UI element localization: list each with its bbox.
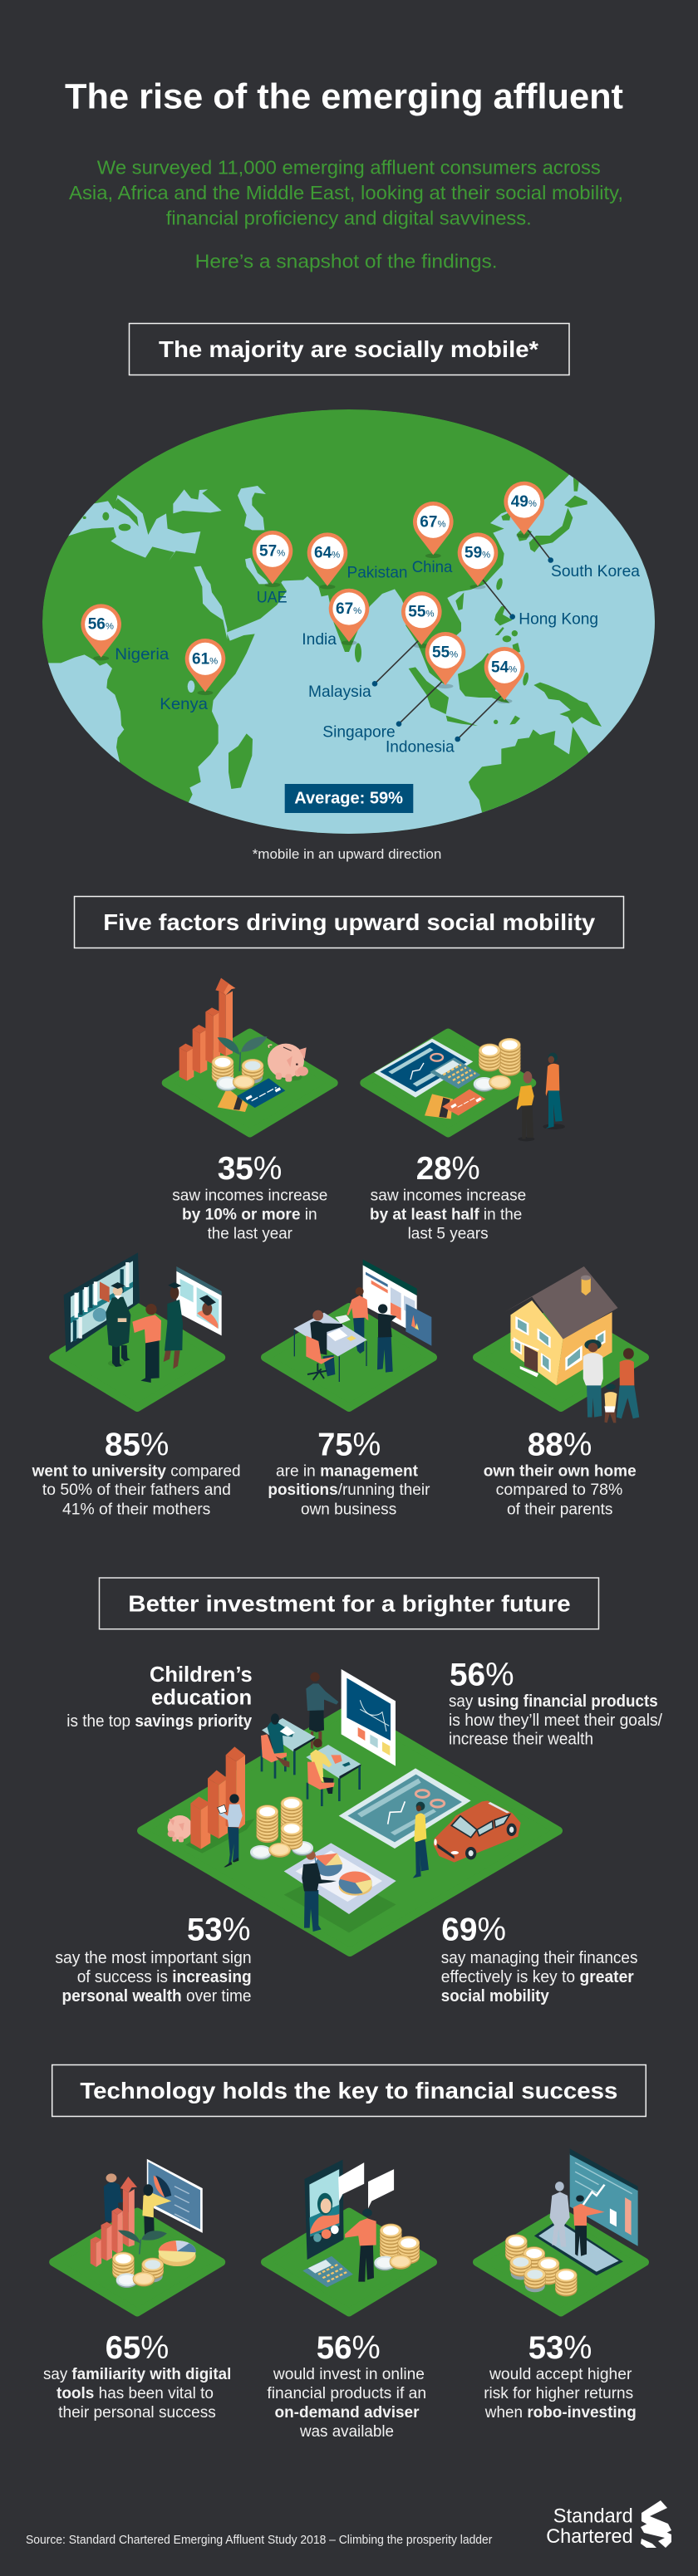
factor 1 stat: saw incomes increase — [172, 1187, 327, 1204]
intro text block — [69, 156, 623, 272]
factor 3: university illustration — [53, 1252, 222, 1408]
title: The rise of the emerging affluent — [65, 77, 623, 117]
man in yellow — [413, 1802, 429, 1878]
pie chart board and man — [284, 1843, 396, 1932]
factor 4 stat: positions/running their — [268, 1481, 430, 1499]
pin: Nigeria 56% — [81, 604, 121, 661]
map panel — [33, 409, 671, 850]
coin stacks — [505, 2235, 577, 2296]
source note: Source: Standard Chartered Emerging Affluent Study 2018 – Climbing the prosperity ladder — [26, 2533, 492, 2547]
pin: China 67%: 67% — [420, 513, 445, 531]
coin stacks — [374, 2224, 420, 2270]
heading: Better investment: Better investment for a brighter future — [128, 1591, 571, 1617]
pin: China 67% — [413, 502, 454, 558]
callout: 69% social mobility — [441, 1912, 638, 2005]
pin: Malaysia 55% — [401, 591, 442, 648]
heading: Five factors — [75, 897, 623, 948]
tablet with chart — [339, 1768, 471, 1849]
callout: 69% social mobility: effectively is key to greater — [441, 1968, 634, 1986]
bar chart and piggy bank — [168, 1746, 255, 1854]
pin: South Korea 49%: 49% — [511, 493, 537, 511]
tech 1 stat: tools has been vital to — [57, 2385, 214, 2402]
orange car — [434, 1800, 521, 1863]
country labels: Kenya — [160, 695, 208, 713]
factor 3 stat: 85% — [105, 1427, 169, 1462]
heading: Technology — [52, 2064, 646, 2116]
factor 1 stat: the last year — [208, 1226, 293, 1242]
factor 4 stat: own business — [301, 1501, 396, 1518]
factor 3 stat: 41% of their mothers — [62, 1501, 210, 1518]
pin: India 67% — [329, 589, 369, 645]
investment illustration — [141, 1669, 558, 1952]
map: land and sea — [33, 409, 671, 850]
pin: Malaysia 55%: 55% — [408, 604, 434, 621]
map footnote: *mobile in an upward direction — [253, 846, 441, 862]
icon: logo ribbons — [641, 2500, 671, 2548]
average badge — [285, 784, 413, 813]
pin: Singapore 55%: 55% — [432, 644, 458, 661]
callout: 53% personal wealth: of success is increasing — [77, 1968, 252, 1986]
country labels: South Korea — [551, 562, 640, 580]
factor 1 stat: by 10% or more in — [182, 1206, 317, 1223]
Standard Chartered logo — [546, 2500, 671, 2548]
callout: 56% financial products: is how they’ll meet their goals/ — [449, 1712, 662, 1730]
coin stacks — [250, 1797, 313, 1860]
factor 3 stat — [32, 1427, 241, 1518]
pin: Nigeria 56%: 56% — [88, 616, 114, 634]
tech 1 stat: their personal success — [58, 2404, 216, 2422]
tech 3 stat: would accept higher — [489, 2366, 632, 2383]
heading: Technology: Technology holds the key to financial success — [80, 2078, 617, 2103]
country labels: Pakistan — [347, 564, 407, 582]
factor 5: home ownership illustration — [477, 1266, 645, 1423]
factor 3 stat: to 50% of their fathers and — [42, 1481, 231, 1499]
factor 2 stat: saw incomes increase — [371, 1187, 526, 1204]
callout: 56% financial products: increase their wealth — [449, 1731, 593, 1749]
callout: 56% financial products: 56% — [450, 1657, 514, 1692]
factor 4 stat: are in management — [276, 1462, 419, 1480]
Standard Chartered logo: Standard — [553, 2506, 633, 2528]
pin: Indonesia 54% — [484, 647, 524, 703]
callout: 69% social mobility: 69% — [441, 1912, 506, 1948]
tech 3 stat: 53% — [528, 2330, 592, 2366]
woman with phone — [218, 1794, 243, 1867]
country labels — [115, 558, 640, 757]
intro text block: We surveyed 11,000 emerging affluent consumers across — [97, 156, 601, 178]
coin stacks — [474, 1038, 520, 1092]
intro text block: Asia, Africa and the Middle East, looking at their social mobility, — [69, 182, 623, 203]
pin: Kenya 61% — [185, 639, 225, 695]
factor 2 stat: by at least half in the — [370, 1206, 522, 1223]
factor 5 stat: of their parents — [507, 1501, 613, 1518]
intro text block: financial proficiency and digital savviness. — [166, 208, 532, 229]
country labels: UAE — [257, 588, 288, 606]
tech 1: digital tools illustration — [53, 2159, 221, 2312]
tech 1 stat: 65% — [106, 2330, 169, 2366]
student desks — [261, 1713, 361, 1806]
pin: Kenya 61%: 61% — [192, 650, 218, 668]
pin: Hong Kong 59%: 59% — [465, 545, 490, 562]
tech 1 stat — [43, 2330, 231, 2422]
callout: 69% social mobility: social mobility — [441, 1987, 549, 2005]
tech 3 stat: risk for higher returns — [484, 2385, 633, 2402]
coin stacks — [212, 1055, 263, 1091]
factor 2 stat — [370, 1151, 526, 1242]
callout: 56% financial products — [449, 1657, 662, 1749]
factor 1: incomes up 10% illustration — [166, 978, 334, 1133]
tech 2 stat — [267, 2330, 426, 2441]
pin: Pakistan 64%: 64% — [314, 545, 340, 562]
country labels: Singapore — [322, 722, 396, 741]
pin: India 67%: 67% — [336, 600, 361, 618]
factor 2 stat: last 5 years — [408, 1226, 489, 1242]
factor 5 stat: 88% — [528, 1427, 592, 1462]
platform diamond — [141, 1708, 558, 1952]
heading: Five factors: Five factors driving upward social mobility — [103, 909, 596, 935]
tech 3 stat — [484, 2330, 637, 2422]
country labels: Malaysia — [308, 683, 371, 701]
factor 2 stat: 28% — [416, 1151, 480, 1187]
tech 2 stat: would invest in online — [273, 2366, 425, 2383]
country labels: India — [302, 630, 337, 649]
tech 2 stat: 56% — [317, 2330, 381, 2366]
factor 4: management illustration — [265, 1260, 433, 1408]
tech 2: on-demand adviser illustration — [265, 2160, 433, 2312]
factor 5 stat: own their own home — [484, 1462, 637, 1480]
callout: children's education: education — [151, 1684, 252, 1709]
pin: Indonesia 54%: 54% — [491, 659, 517, 676]
tech 1 stat: say familiarity with digital — [43, 2366, 231, 2383]
factor 3 stat: went to university compared — [32, 1462, 241, 1480]
factor 5 stat: compared to 78% — [496, 1481, 622, 1499]
two people — [517, 1053, 565, 1141]
factor 2: incomes up by half illustration — [364, 1033, 565, 1141]
pin: Hong Kong 59% — [458, 532, 498, 590]
pin: UAE 57% — [253, 531, 292, 587]
country labels: Nigeria — [115, 645, 169, 664]
factor 1 stat — [172, 1151, 327, 1242]
factor 4 stat — [268, 1427, 430, 1518]
callout: 53% personal wealth: personal wealth over time — [61, 1987, 251, 2005]
tech 3 stat: when robo-investing — [484, 2404, 637, 2422]
callout: 53% personal wealth: 53% — [187, 1912, 251, 1948]
coin stacks — [112, 2252, 164, 2288]
callout: children's education: is the top savings priority — [66, 1712, 253, 1731]
callout: children's education: Children’s — [150, 1662, 253, 1687]
country labels: Hong Kong — [519, 610, 598, 629]
callout: 53% personal wealth — [55, 1912, 252, 2005]
country labels: Indonesia — [386, 738, 455, 757]
pin: Singapore 55% — [425, 632, 465, 688]
heading: Better investment — [100, 1578, 598, 1629]
pin: South Korea 49% — [504, 482, 544, 538]
country labels: China — [412, 558, 453, 576]
classroom board and teacher — [306, 1669, 396, 1766]
pin: UAE 57%: 57% — [259, 542, 285, 560]
tech 2 stat: was available — [299, 2423, 394, 2441]
factor 1 stat: 35% — [218, 1151, 282, 1187]
average badge: Average: 59% — [294, 789, 403, 807]
leader lines with end dots — [372, 530, 553, 742]
intro text block: Here’s a snapshot of the findings. — [195, 251, 498, 272]
heading: The majority are socially mobile: The majority are socially mobile* — [159, 336, 538, 362]
callout: 69% social mobility: say managing their finances — [441, 1949, 638, 1967]
tech 2 stat: on-demand adviser — [274, 2404, 420, 2422]
callout: 56% financial products: say using financial products — [449, 1692, 658, 1711]
Standard Chartered logo: Chartered — [546, 2526, 633, 2548]
callout: 53% personal wealth: say the most important sign — [55, 1949, 252, 1967]
factor 5 stat — [484, 1427, 637, 1518]
callout: children's education — [66, 1662, 253, 1731]
heading: The majority are socially mobile — [130, 324, 569, 375]
tech 3: robo-investing illustration — [477, 2148, 645, 2312]
factor 4 stat: 75% — [317, 1427, 381, 1462]
pin: Pakistan 64% — [307, 532, 347, 590]
tech 2 stat: financial products if an — [267, 2385, 426, 2402]
